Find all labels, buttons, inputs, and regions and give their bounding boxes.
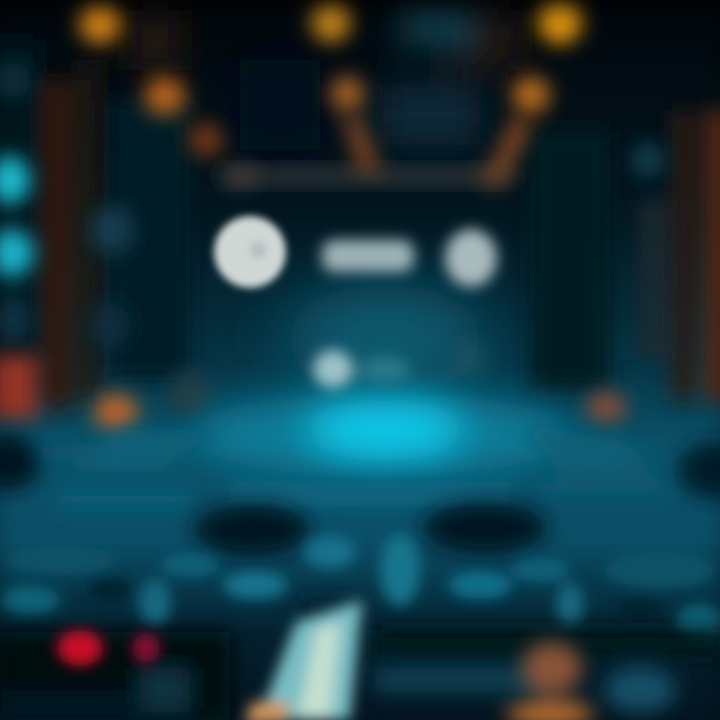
central glow (190, 285, 570, 477)
white clock icon (214, 216, 286, 288)
side walls (0, 40, 720, 410)
floor band (0, 425, 720, 506)
left red glow (0, 355, 210, 430)
ceiling (130, 5, 520, 150)
ceiling beam (225, 168, 510, 184)
red lights (57, 630, 160, 666)
right details (454, 142, 665, 422)
orange floor glow (506, 642, 594, 720)
floor streaks (0, 534, 720, 640)
central light strip (244, 600, 362, 720)
ceiling lights (79, 0, 582, 186)
small white glow (313, 350, 410, 388)
left edge panels (0, 62, 134, 347)
white label bar (322, 240, 414, 272)
white round icon (445, 229, 497, 287)
dark floor shapes (194, 502, 547, 556)
lower consoles (0, 600, 720, 720)
